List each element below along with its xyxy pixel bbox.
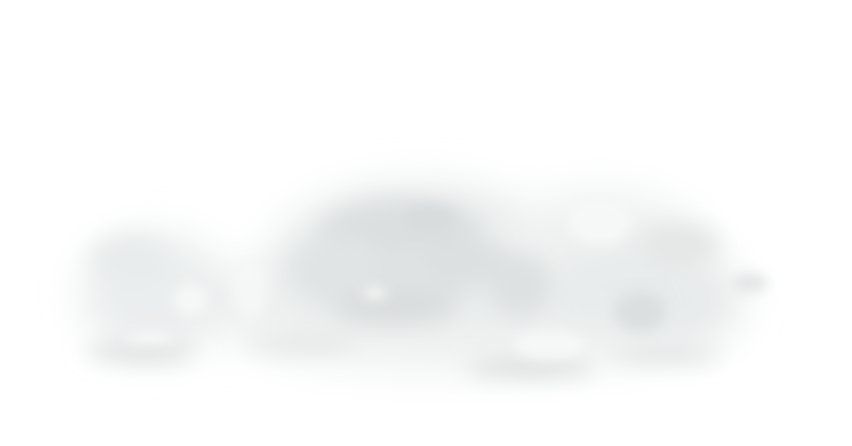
cloud: highlights and dark details	[124, 198, 768, 359]
cloud: central grey mass	[85, 200, 723, 377]
cloud: pale outer haze	[80, 184, 745, 371]
